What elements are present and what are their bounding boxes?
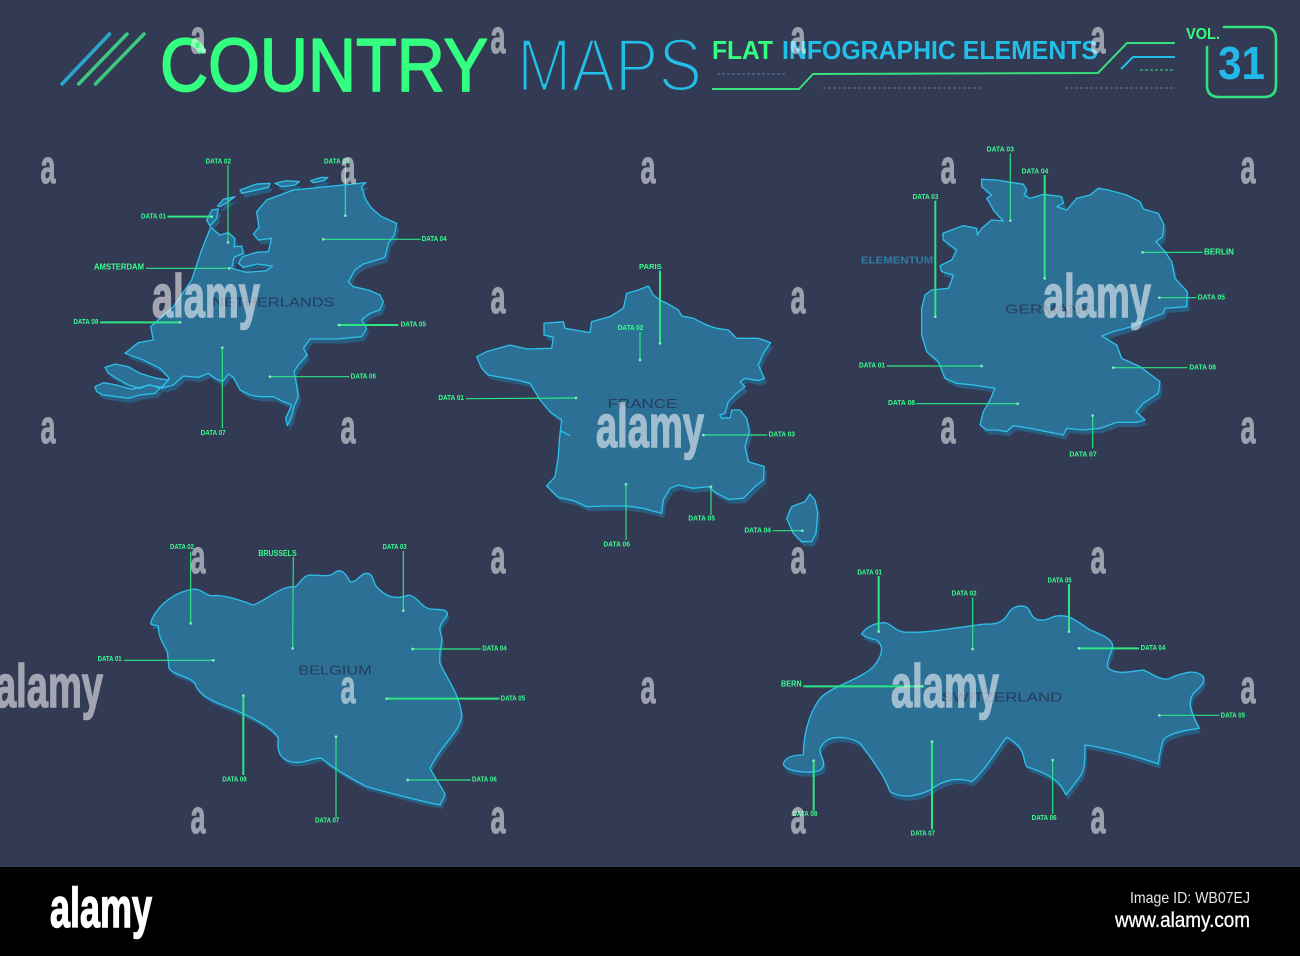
shape: Switzerland — [783, 606, 1206, 801]
callout: data 01 — [438, 393, 577, 402]
callout: data 06: DATA 06 — [1032, 813, 1057, 822]
watermark: small letters: a — [790, 10, 806, 63]
callout: data 08: DATA 08 — [73, 317, 98, 326]
callout: data 06 — [603, 483, 630, 549]
callout: data 05 right — [1158, 710, 1245, 719]
callout: data 07 — [911, 740, 935, 838]
callout: data 02: DATA 02 — [618, 323, 643, 332]
watermark: large logos: alamy — [1043, 263, 1151, 330]
callout: data 05 — [338, 320, 426, 329]
callout: data 04 — [744, 526, 804, 535]
watermark: small letters: a — [640, 140, 656, 193]
callout: Amsterdam: AMSTERDAM — [94, 261, 144, 271]
callout: data 07: DATA 07 — [201, 428, 226, 437]
callout: data 01 — [859, 360, 983, 369]
watermark: small letters: a — [1090, 530, 1106, 583]
callout: data 02: DATA 02 — [206, 156, 231, 165]
watermark: small letters: a — [790, 790, 806, 843]
footer bar — [0, 867, 1300, 956]
callout: data 02 — [170, 542, 194, 625]
callout: data 03 top — [987, 145, 1014, 222]
callout: data 05 top — [1048, 575, 1072, 633]
watermark: small letters: a — [1090, 790, 1106, 843]
callout: data 03: DATA 03 — [769, 430, 795, 439]
country name: SWITZERLAND — [942, 689, 1062, 704]
callout: data 06: DATA 06 — [351, 371, 376, 380]
shape: France — [477, 286, 820, 546]
map: Germany — [859, 145, 1234, 459]
callout: data 02 — [206, 156, 231, 244]
callout: Bern: BERN — [781, 679, 802, 689]
callout: data 04: DATA 04 — [1141, 643, 1166, 652]
circuit line: green — [712, 43, 1175, 89]
country name: GERMANY — [1005, 301, 1092, 316]
callout: data 08 — [73, 317, 181, 326]
circuit line: blue — [1121, 57, 1175, 69]
header — [62, 23, 1276, 107]
map: Switzerland — [781, 567, 1245, 838]
watermark: small letters: a — [190, 790, 206, 843]
callout: data 04: DATA 04 — [744, 526, 772, 535]
callout: data 08: DATA 08 — [222, 775, 247, 784]
callout: data 05: DATA 05 — [1198, 292, 1225, 301]
watermark: small letters: a — [490, 790, 506, 843]
callout: data 04 — [322, 234, 447, 243]
callout: data 02 — [618, 323, 643, 361]
callout: data 01 — [98, 654, 215, 663]
callout: data 08: DATA 08 — [792, 809, 817, 818]
watermark: small letters: a — [490, 10, 506, 63]
watermark: small letters: a — [40, 400, 56, 453]
map: Netherlands — [73, 156, 447, 437]
watermark: small letters: a — [940, 140, 956, 193]
callout: data 07: DATA 07 — [315, 815, 339, 824]
volume badge — [1207, 27, 1276, 97]
label: Elementum: ELEMENTUM — [861, 255, 933, 266]
callout: data 08 — [222, 694, 247, 784]
watermark: small letters: a — [190, 530, 206, 583]
callout: data 08 left: DATA 08 — [888, 398, 915, 407]
watermark: small letters: a — [940, 400, 956, 453]
volume number: 31 — [1218, 37, 1265, 89]
callout: data 03 — [702, 430, 795, 439]
country name: BELGIUM — [298, 662, 372, 677]
subtitle: Infographic Elements: INFOGRAPHIC ELEMENTS — [782, 35, 1098, 65]
callout: data 02: DATA 02 — [170, 542, 194, 551]
callout: data 01: DATA 01 — [857, 567, 882, 576]
callout: data 03: DATA 03 — [383, 542, 407, 551]
watermark: small letters: a — [640, 660, 656, 713]
callout: data 01 — [141, 211, 213, 220]
callout: data 05 right: DATA 05 — [1221, 710, 1245, 719]
callout: data 01 — [857, 567, 882, 633]
callout: data 03 left: DATA 03 — [913, 192, 938, 201]
callout: data 03 — [383, 542, 407, 612]
callout: Berlin: BERLIN — [1204, 246, 1234, 256]
callout: data 03 left — [913, 192, 938, 318]
map: Belgium — [98, 542, 525, 824]
callout: data 03 — [324, 156, 349, 217]
callout: data 04 — [1078, 643, 1166, 652]
shape: Netherlands — [95, 177, 399, 430]
callout: Amsterdam — [94, 261, 231, 271]
callout: data 01: DATA 01 — [98, 654, 122, 663]
callout: data 04: DATA 04 — [422, 234, 447, 243]
callout: data 05 — [1158, 292, 1225, 301]
watermark: small letters: a — [490, 530, 506, 583]
callout: data 05 top: DATA 05 — [1048, 575, 1072, 584]
shape: Belgium — [151, 571, 464, 809]
country name: NETHERLANDS — [212, 295, 335, 310]
callout: data 03: DATA 03 — [324, 156, 349, 165]
subtitle: Flat: FLAT — [712, 35, 773, 65]
callout: data 05: DATA 05 — [401, 320, 426, 329]
callout: data 07 — [201, 346, 226, 437]
watermark: small letters: a — [190, 10, 206, 63]
icon: three diagonal strokes — [62, 34, 144, 84]
callout: data 07: DATA 07 — [911, 829, 935, 838]
title: Country: COUNTRY — [160, 23, 488, 107]
callout: data 04: DATA 04 — [482, 644, 507, 653]
watermark: large logos: alamy — [0, 653, 103, 720]
map: France — [438, 262, 820, 549]
watermark: small letters: a — [40, 140, 56, 193]
watermark: small letters: a — [340, 400, 356, 453]
callout: data 04 — [411, 644, 507, 653]
callout: data 02: DATA 02 — [952, 589, 977, 598]
callout: Brussels: BRUSSELS — [258, 548, 297, 558]
volume label: VOL. — [1186, 26, 1220, 43]
callout: data 07: DATA 07 — [1069, 450, 1097, 459]
callout: Paris — [639, 262, 662, 345]
callout: data 08 left — [888, 398, 1019, 407]
watermark: small letters: a — [340, 660, 356, 713]
watermark: small letters: a — [1090, 10, 1106, 63]
callout: data 05 — [385, 694, 525, 703]
footer logo: alamy — [50, 876, 152, 939]
callout: data 08 right — [1112, 362, 1216, 371]
callout: data 07 — [315, 735, 339, 824]
dashed accents — [717, 70, 1176, 88]
callout: data 04 — [1022, 166, 1049, 280]
watermark: small letters: a — [790, 270, 806, 323]
callout: Paris: PARIS — [639, 262, 662, 271]
watermark: large logos: alamy — [152, 263, 260, 330]
watermark: large logos — [0, 263, 1151, 720]
country name: FRANCE — [608, 396, 677, 411]
callout: data 06 — [269, 371, 376, 380]
callout: data 08 — [792, 759, 817, 818]
callout: data 01: DATA 01 — [859, 360, 885, 369]
callout: data 03 top: DATA 03 — [987, 145, 1014, 154]
shape: Germany — [922, 179, 1190, 440]
watermark: small letters: a — [1240, 400, 1256, 453]
callout: data 06 — [1032, 759, 1057, 822]
callout: data 05: DATA 05 — [501, 694, 525, 703]
callout: data 04: DATA 04 — [1022, 166, 1049, 175]
callout: Brussels — [258, 548, 297, 650]
image id: Image ID: WB07EJ — [1130, 890, 1250, 907]
callout: Berlin — [1141, 246, 1234, 256]
watermark: small letters: a — [1240, 140, 1256, 193]
callout: data 05: DATA 05 — [688, 514, 715, 523]
watermark: large logos: alamy — [596, 393, 704, 460]
watermark: small letters: a — [1240, 660, 1256, 713]
callout: data 05 — [688, 485, 715, 523]
watermark: small letters: a — [490, 270, 506, 323]
callout: data 06: DATA 06 — [603, 540, 630, 549]
callout: data 07 — [1069, 414, 1097, 459]
callout: data 08 right: DATA 08 — [1189, 362, 1216, 371]
watermark: small letters: a — [340, 140, 356, 193]
callout: data 06 — [406, 775, 497, 784]
callout: data 02 — [952, 589, 977, 650]
watermark: small letters: a — [790, 530, 806, 583]
watermark: large logos: alamy — [891, 653, 999, 720]
callout: data 06: DATA 06 — [472, 775, 497, 784]
callout: data 01: DATA 01 — [438, 393, 464, 402]
website: www.alamy.com — [1114, 909, 1250, 932]
callout: data 01: DATA 01 — [141, 211, 166, 220]
title: Maps: MAPS — [517, 23, 702, 107]
